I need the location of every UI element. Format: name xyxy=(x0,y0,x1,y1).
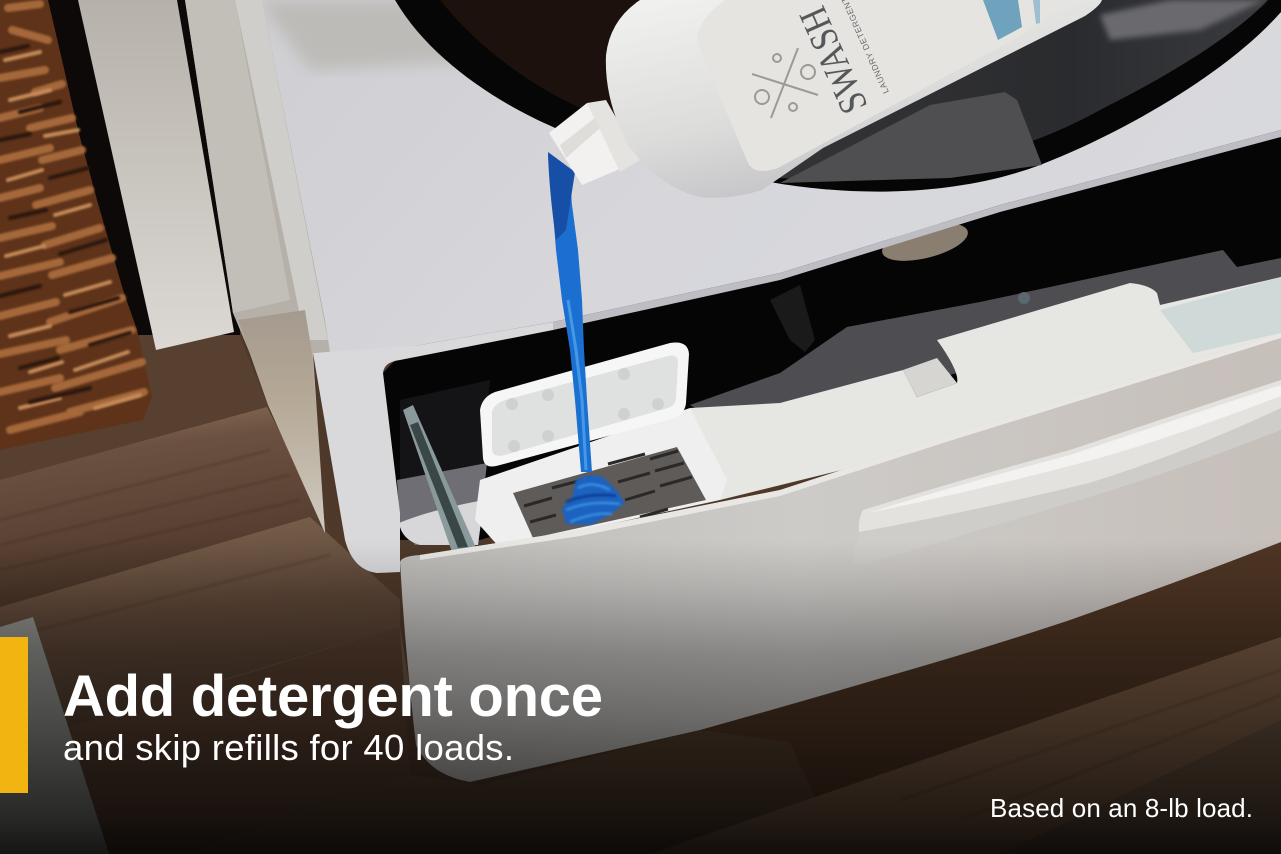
dark cavity behind drawer xyxy=(383,125,1281,545)
wicker basket xyxy=(0,0,152,450)
drawer rail xyxy=(403,405,477,552)
label colour block xyxy=(983,0,1022,40)
brand name: SWASH xyxy=(791,0,876,120)
cabinet side panel xyxy=(185,0,330,533)
bottle neck and cap xyxy=(549,100,640,185)
detergent puddle xyxy=(562,475,625,525)
dark gradient overlay xyxy=(0,540,1281,854)
drawer handle xyxy=(853,380,1281,565)
washer door xyxy=(395,0,1281,192)
cabinet lower lip xyxy=(553,130,1281,330)
brand logo xyxy=(752,48,818,118)
bottle body xyxy=(606,0,1102,198)
detergent bottle xyxy=(549,0,1102,198)
drawer front panel xyxy=(400,333,1281,782)
drawer top with compartments xyxy=(475,277,1281,548)
washer cabinet xyxy=(185,0,1281,573)
grey object at lower left xyxy=(0,617,109,854)
detergent stream xyxy=(548,152,592,472)
lower cabinet front xyxy=(313,322,553,573)
headline: Add detergent once xyxy=(63,664,603,729)
dispenser flip lid xyxy=(480,342,689,466)
cabinet top highlight xyxy=(258,0,640,70)
wall and baseboard xyxy=(0,0,240,350)
label colour block small xyxy=(1033,0,1040,24)
dispenser grate xyxy=(513,447,706,538)
subheading: and skip refills for 40 loads. xyxy=(63,727,514,768)
footnote: Based on an 8-lb load. xyxy=(990,793,1253,823)
bottle label xyxy=(697,0,1072,171)
yellow accent bar xyxy=(0,637,28,793)
